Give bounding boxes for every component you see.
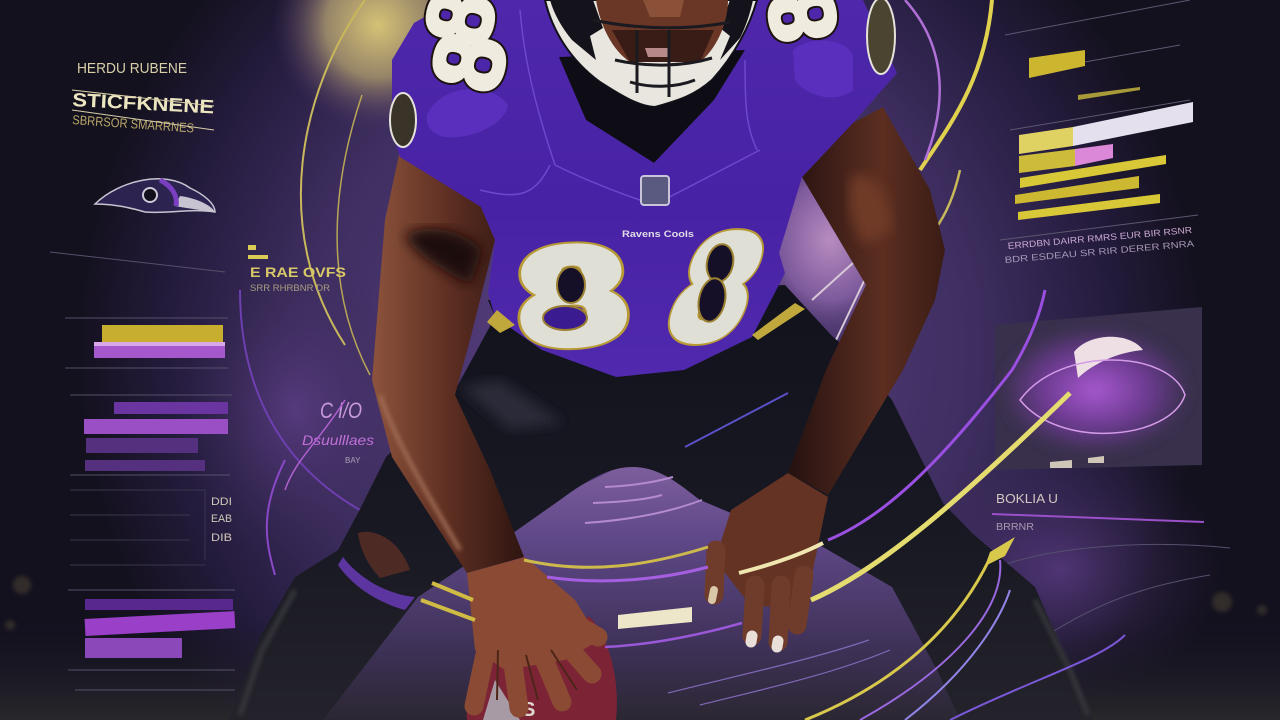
chest number: 8 <box>650 205 782 370</box>
right arm <box>788 107 945 495</box>
script annotation <box>285 398 374 490</box>
jersey wordmark: Ravens Cools <box>622 229 694 239</box>
script annotation: C I/O <box>320 398 362 423</box>
chest number: 8 <box>650 205 782 370</box>
right bar chart: BDR ESDEAU SR RIR DERER RNRA <box>1004 238 1194 265</box>
left hand <box>467 557 600 708</box>
left bar chart <box>50 252 235 690</box>
right image panel <box>995 307 1202 470</box>
chest number: 8 <box>516 218 629 374</box>
left text block: STICFKNENE <box>72 90 215 118</box>
right hand <box>712 473 828 647</box>
knee band <box>338 557 415 610</box>
left text block <box>72 60 215 136</box>
player <box>229 0 1093 720</box>
left label: E RAE OVFS <box>250 264 346 280</box>
chest number <box>516 205 782 374</box>
jersey crest <box>641 176 669 205</box>
left text block: HERDU RUBENE <box>77 60 187 77</box>
right bar chart: ERRDBN DAIRR RMRS EUR BIR RSNR <box>1007 225 1193 251</box>
pale lines behind arm <box>812 263 866 340</box>
left label <box>248 245 346 293</box>
left bar chart: EAB <box>211 513 232 525</box>
waist accents <box>487 303 805 340</box>
neck <box>555 50 745 163</box>
right caption: BRRNR <box>996 522 1034 533</box>
foreground light streaks <box>421 290 1125 720</box>
trousers and legs <box>229 285 1093 720</box>
knee opening <box>358 532 410 578</box>
left bar chart: DDI <box>211 496 232 508</box>
right caption: BOKLIA U <box>996 491 1058 506</box>
right bar chart <box>1000 0 1198 265</box>
shoulder pads <box>427 89 508 137</box>
jersey <box>392 0 897 377</box>
football <box>467 617 617 720</box>
left label: SRR RHRBNR DR <box>250 283 331 293</box>
shoulder numbers: 8 <box>410 24 528 100</box>
left arm <box>372 150 524 573</box>
decorative orbit arcs <box>240 0 992 575</box>
right caption <box>990 491 1230 640</box>
shoulder logos <box>390 93 416 147</box>
center area between the legs <box>310 460 975 720</box>
script annotation: BAY <box>345 456 361 465</box>
helmet <box>545 0 757 107</box>
chest number: 8 <box>516 218 629 374</box>
icon: raven head logo <box>95 179 215 212</box>
left text block: SBRRSOR SMARRNES <box>72 112 195 136</box>
shoulder numbers <box>406 0 858 100</box>
script annotation: Dsuulllaes <box>302 432 374 448</box>
leg highlights <box>240 590 295 715</box>
left bar chart: DIB <box>211 532 232 544</box>
background dots <box>5 576 1267 630</box>
shoulder numbers: 8 <box>410 24 528 100</box>
